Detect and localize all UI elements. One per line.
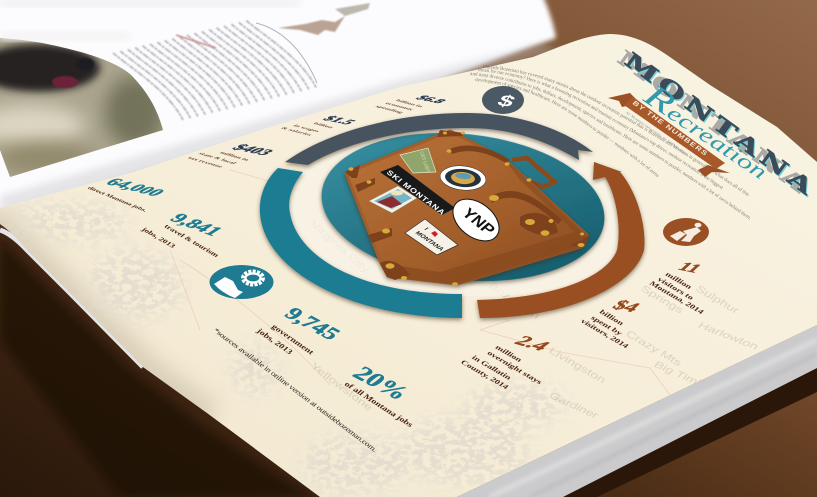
- stat: tax revenue: state & local: [197, 152, 238, 165]
- sticker: YNP oval: [445, 191, 507, 249]
- stat: economic spending: economic: [383, 102, 416, 111]
- suitcase body: [346, 131, 587, 284]
- stat: economic spending: [374, 94, 450, 114]
- title block: [608, 46, 817, 202]
- map place names: Harlowton: [695, 320, 761, 352]
- map place names: Livingston: [546, 345, 608, 385]
- inner ring backdrop: [289, 128, 619, 296]
- ribbon banner: [608, 93, 730, 177]
- title: Montana: MONTANA: [613, 46, 811, 198]
- sticker: I love Montana: MONTANA: [413, 230, 446, 252]
- stat: government jobs: 9,745: [280, 304, 346, 344]
- sticker: YNP oval: YNP: [458, 205, 499, 238]
- stat: travel jobs: travel & tourism: [162, 223, 222, 259]
- map rivers: [170, 170, 670, 395]
- stat: direct jobs: 64,000: [100, 176, 169, 199]
- footnote: *sources available in online version at outsidebozeman.com.: [212, 327, 379, 453]
- suitcase handle: [512, 158, 555, 187]
- stat: wages: [279, 115, 359, 137]
- suitcase side panel: [503, 157, 588, 235]
- stat: economic spending: billion in: [394, 99, 425, 108]
- left magazine page with photo and article: [0, 0, 556, 218]
- stat: overnight stays: in Gallatin: [470, 354, 513, 381]
- sticker: Ski Montana: SKI MONTANA: [385, 169, 447, 216]
- map background: [0, 170, 761, 495]
- circular diagram: [260, 113, 644, 318]
- icon: mountain and gear: [210, 265, 274, 299]
- stat: overnight stays: 2.4: [509, 333, 555, 354]
- title: Montana: MONTANA: [621, 50, 817, 202]
- gutter shading: [0, 215, 210, 418]
- map place names: [308, 218, 761, 421]
- stat: wages: in wages: [291, 124, 322, 133]
- icon: traveler: [663, 218, 709, 246]
- map place names: Bozeman: [486, 280, 542, 321]
- page shadow: [0, 44, 560, 225]
- sticker: green Montana: GET LOST: [418, 151, 430, 174]
- byline: by Montana infographic by Melissa Dye: [625, 111, 687, 155]
- stat: tax revenue: million in: [218, 151, 251, 162]
- sticker: green Montana: [400, 148, 436, 174]
- teal arc: jobs: [260, 168, 462, 318]
- map place names: Virginia City: [308, 218, 372, 276]
- stat: visitors: 11: [674, 259, 706, 275]
- map place names: Sulphur: [693, 283, 742, 316]
- brown arc: visitors: [477, 162, 644, 318]
- sticker: I love Montana: [405, 219, 458, 255]
- article text column: [113, 21, 316, 120]
- intro paragraph: and most diverse contributor to jobs, dollars, development, species and healthcare. Here are some numbers to ponder, numbers with a lot of zeros behind them.: [470, 72, 750, 220]
- map terrain: [10, 202, 565, 495]
- stat: tax revenue: tax revenue: [186, 156, 225, 169]
- stat: visitor spending: $4: [608, 297, 644, 315]
- intro paragraph: Outside Bozeman has covered many stories about the outdoor recreation potential that is Bozeman and Montana in general. But what does all of this: [483, 65, 749, 196]
- navy arc: economy: [285, 113, 593, 165]
- ribbon text: BY THE NUMBERS: [631, 99, 709, 157]
- stat: travel jobs: [139, 211, 227, 259]
- stat: overnight stays: County, 2014: [459, 359, 511, 391]
- article headline accent: [176, 35, 216, 48]
- map place names: Crazy Mts: [623, 328, 684, 368]
- icon: dollar sign: $: [494, 92, 520, 111]
- table shadow left: [0, 240, 310, 497]
- straps and corners: [345, 130, 590, 280]
- book shadow right: [555, 365, 817, 497]
- stat: wages: $1.5: [319, 115, 359, 126]
- stat: travel jobs: 9,841: [165, 211, 227, 239]
- stat: visitor spending: [579, 297, 644, 350]
- stat: wages: & salaries: [279, 127, 314, 137]
- icon: dollar sign: [482, 86, 524, 114]
- column curve rule: [256, 23, 317, 83]
- suitcase lower lip: [380, 232, 588, 285]
- stat: tax revenue: $403: [228, 142, 278, 157]
- brass rivets: [348, 132, 584, 286]
- title: Montana: MONTANA: [620, 48, 817, 200]
- stat: share of jobs: 20%: [347, 362, 416, 404]
- stat: direct jobs: direct Montana jobs.: [86, 186, 149, 213]
- sticker: park seal: [439, 164, 487, 192]
- teal disc: [314, 120, 612, 294]
- sticker: I love Montana: I: [422, 227, 430, 232]
- stat: share of jobs: of all Montana jobs: [343, 380, 416, 429]
- intro paragraph: development of species and healthcare. Here are some numbers to ponder — numbers with a lot of zeros: [475, 78, 659, 177]
- stat: visitors: Montana, 2014: [648, 280, 706, 316]
- stat: visitors: [648, 259, 706, 316]
- map place names: Yellowstone: [308, 360, 375, 414]
- page edges strip: [457, 325, 817, 497]
- stat: tax revenue: [186, 142, 278, 169]
- stat: government jobs: jobs, 2013: [254, 326, 296, 356]
- stat: visitor spending: visitors, 2014: [579, 318, 631, 350]
- map place names: Gardiner: [546, 390, 601, 421]
- stat: economic spending: $6.8: [412, 94, 450, 105]
- book curled edge bottom left: [0, 230, 143, 367]
- horse illustration: [278, 3, 370, 35]
- stat: overnight stays: [459, 333, 555, 391]
- map place names: Big Timber: [651, 359, 719, 395]
- stat: visitors: million: [664, 271, 694, 290]
- white page: [0, 0, 556, 218]
- stat: government jobs: [254, 304, 346, 356]
- photo of rider: [0, 36, 170, 181]
- stat: economic spending: spending: [374, 105, 406, 114]
- stat: government jobs: government: [270, 322, 316, 356]
- stat: travel jobs: jobs, 2013: [139, 225, 178, 249]
- stat: visitor spending: billion: [598, 309, 626, 327]
- intro paragraph: mean for our economy? Here is what a booming recreation and tourism economy (Montana's top driver, outdoor recreation is the biggest: [478, 68, 723, 190]
- stat: direct jobs: [86, 176, 169, 213]
- stat: visitor spending: spent by: [589, 315, 625, 337]
- map place names: Springs: [638, 283, 686, 316]
- title: Recreation script: Recreation: [637, 76, 777, 186]
- suitcase illustration: [345, 130, 590, 286]
- stat: visitors: visitors to: [656, 276, 695, 301]
- stat: wages: billion: [311, 122, 336, 129]
- sticker: photo: [369, 186, 417, 213]
- stat: overnight stays: overnight stays: [485, 350, 545, 386]
- stat: overnight stays: million: [494, 344, 524, 363]
